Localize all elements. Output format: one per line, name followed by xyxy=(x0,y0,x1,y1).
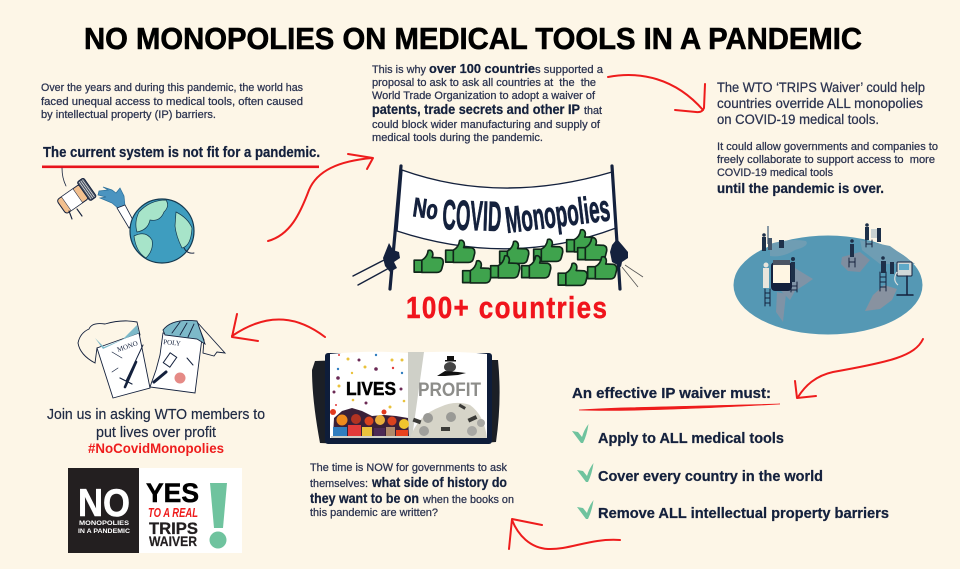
illustration: protest banner with thumbs xyxy=(353,166,643,326)
check and item 1: Apply to ALL medical tools xyxy=(598,431,784,447)
crowd of people xyxy=(330,408,409,438)
text block: TRIPS waiver: freely collaborate to support access to more xyxy=(717,154,935,166)
banner slogan: No xyxy=(411,192,440,225)
text block: unequal access xyxy=(41,82,303,121)
text block: over 100 countries xyxy=(372,62,604,144)
text block: side of history: what side of history do xyxy=(371,475,507,490)
check and item 1 xyxy=(572,424,784,447)
text block: side of history: themselves: xyxy=(310,478,368,490)
banner slogan: Monopolies xyxy=(503,187,612,241)
landmasses xyxy=(770,240,915,322)
globe xyxy=(130,199,194,263)
hands holding poles xyxy=(383,243,400,272)
panel: current system xyxy=(41,82,320,263)
confetti xyxy=(332,354,405,408)
bottle legs xyxy=(69,209,82,219)
workers xyxy=(762,223,894,288)
text block: TRIPS waiver: It could allow governments and companies to xyxy=(717,141,938,153)
illustration: world map with medical tools xyxy=(734,223,922,334)
bottle string xyxy=(62,168,66,186)
text block: over 100 countries: s supported a xyxy=(535,64,604,76)
right hand xyxy=(163,320,225,356)
logo: no monopolies, yes to a real TRIPS waiver: TRIPS xyxy=(149,519,198,538)
check and item 2 xyxy=(577,463,823,485)
arrow: system to banner xyxy=(268,154,373,241)
text block: side of history: this pandemic are written? xyxy=(310,507,438,519)
inner cover xyxy=(325,353,492,444)
illustration: hands tearing monopoly paper xyxy=(78,320,225,398)
left page xyxy=(330,352,408,438)
syringe xyxy=(112,345,143,387)
ocean xyxy=(734,236,922,334)
right sheet xyxy=(150,333,202,393)
banner slogan: COVID xyxy=(442,191,502,240)
text block: unequal access: by intellectual property (IP) barriers. xyxy=(41,109,216,121)
banner poles xyxy=(390,166,620,289)
ladders xyxy=(765,240,886,306)
text block: over 100 countries: World Trade Organization to adopt a waiver of xyxy=(372,90,596,102)
text block: join us xyxy=(47,407,265,456)
text block: over 100 countries: medical tools during the pandemic. xyxy=(372,132,543,144)
pile of money xyxy=(410,403,487,438)
large pill jar xyxy=(772,260,791,290)
red brush underline xyxy=(579,404,780,410)
text block: side of history: they want to be on xyxy=(310,491,419,506)
illustration: lives vs profit book xyxy=(312,352,500,444)
back cover xyxy=(312,360,500,444)
100+ countries: 100+ countries xyxy=(406,291,607,326)
left hand xyxy=(78,321,140,363)
monopoly man xyxy=(437,356,466,376)
logo: no monopolies, yes to a real TRIPS waiver: NO xyxy=(78,482,130,525)
logo: no monopolies, yes to a real TRIPS waiver: TO A REAL xyxy=(148,505,198,520)
text block: over 100 countries: patents, trade secrets and other IP xyxy=(372,102,580,117)
text block: over 100 countries: proposal to ask to ask all countries at the the xyxy=(372,77,596,89)
arrow: to TRIPS waiver xyxy=(608,75,705,112)
text block: TRIPS waiver: The WTO ‘TRIPS Waiver’ could help xyxy=(717,80,925,95)
red underline xyxy=(42,166,319,168)
text block: join us: put lives over profit xyxy=(96,425,216,441)
left glove highlight xyxy=(95,325,139,349)
banner slogan xyxy=(411,187,612,241)
POLY: POLY xyxy=(163,338,181,348)
text block: unequal access: Over the years and during this pandemic, the world has xyxy=(41,82,303,94)
check and item 3: Remove ALL intellectual property barriers xyxy=(598,506,889,522)
logo: no monopolies, yes to a real TRIPS waiver: MONOPOLIES xyxy=(79,520,130,527)
text block: over 100 countries: could block wider manufacturing and supply of xyxy=(372,119,601,131)
heading: An effective IP waiver must: xyxy=(572,386,771,402)
LIVES: LIVES xyxy=(346,379,396,399)
text block: TRIPS waiver: COVID-19 medical tools xyxy=(717,167,833,179)
arrow: book to torn patent xyxy=(232,314,325,341)
PROFIT: PROFIT xyxy=(418,380,481,401)
logo: no monopolies, yes to a real TRIPS waiver: YES xyxy=(146,478,199,508)
hashtag: #NoCovidMonopolies xyxy=(88,440,224,456)
text block: side of history: when the books on xyxy=(422,494,514,506)
text block: TRIPS waiver: on COVID-19 medical tools. xyxy=(717,112,879,127)
check and item 3 xyxy=(577,500,889,522)
text block: TRIPS waiver: countries override ALL monopolies xyxy=(717,96,923,111)
logo: no monopolies, yes to a real TRIPS waiver: WAIVER xyxy=(149,533,197,549)
icon: pill bottle reaching globe xyxy=(55,168,194,263)
thumbs up icons xyxy=(414,230,617,285)
text block: TRIPS waiver xyxy=(717,80,938,196)
arrow: list to book text xyxy=(509,519,620,549)
text block: over 100 countries: over 100 countrie xyxy=(429,62,535,76)
gloved hand xyxy=(98,187,125,209)
title: NO MONOPOLIES ON MEDICAL TOOLS IN A PANDEMIC xyxy=(84,21,862,56)
arrow: map to IP waiver xyxy=(795,339,923,398)
text block: side of history xyxy=(310,462,514,519)
check and item 2: Cover every country in the world xyxy=(598,469,823,485)
text block: join us: Join us in asking WTO members to xyxy=(47,407,265,423)
logo: no monopolies, yes to a real TRIPS waiver: IN A PANDEMIC xyxy=(78,529,131,535)
logo: no monopolies, yes to a real TRIPS waiver xyxy=(68,468,242,553)
medical tools on sheet xyxy=(154,353,193,384)
text block: over 100 countries: that xyxy=(584,105,602,117)
text block: TRIPS waiver: until the pandemic is over. xyxy=(717,181,884,196)
sleeve xyxy=(117,205,134,228)
panel: effective IP waiver xyxy=(572,386,889,522)
ventilator xyxy=(895,262,913,295)
pill bottle xyxy=(55,178,97,217)
banner cloth xyxy=(397,170,616,249)
text block: unequal access: faced unequal access to medical tools, often caused xyxy=(41,96,303,108)
left sheet xyxy=(97,333,150,398)
heading: the current system: The current system is not fit for a pandemic. xyxy=(43,145,320,161)
text block: side of history: The time is NOW for governments to ask xyxy=(310,462,507,474)
page shadow xyxy=(408,352,424,438)
MONO: MONO xyxy=(116,339,139,354)
right page xyxy=(408,352,487,438)
text block: over 100 countries: This is why xyxy=(372,64,426,76)
